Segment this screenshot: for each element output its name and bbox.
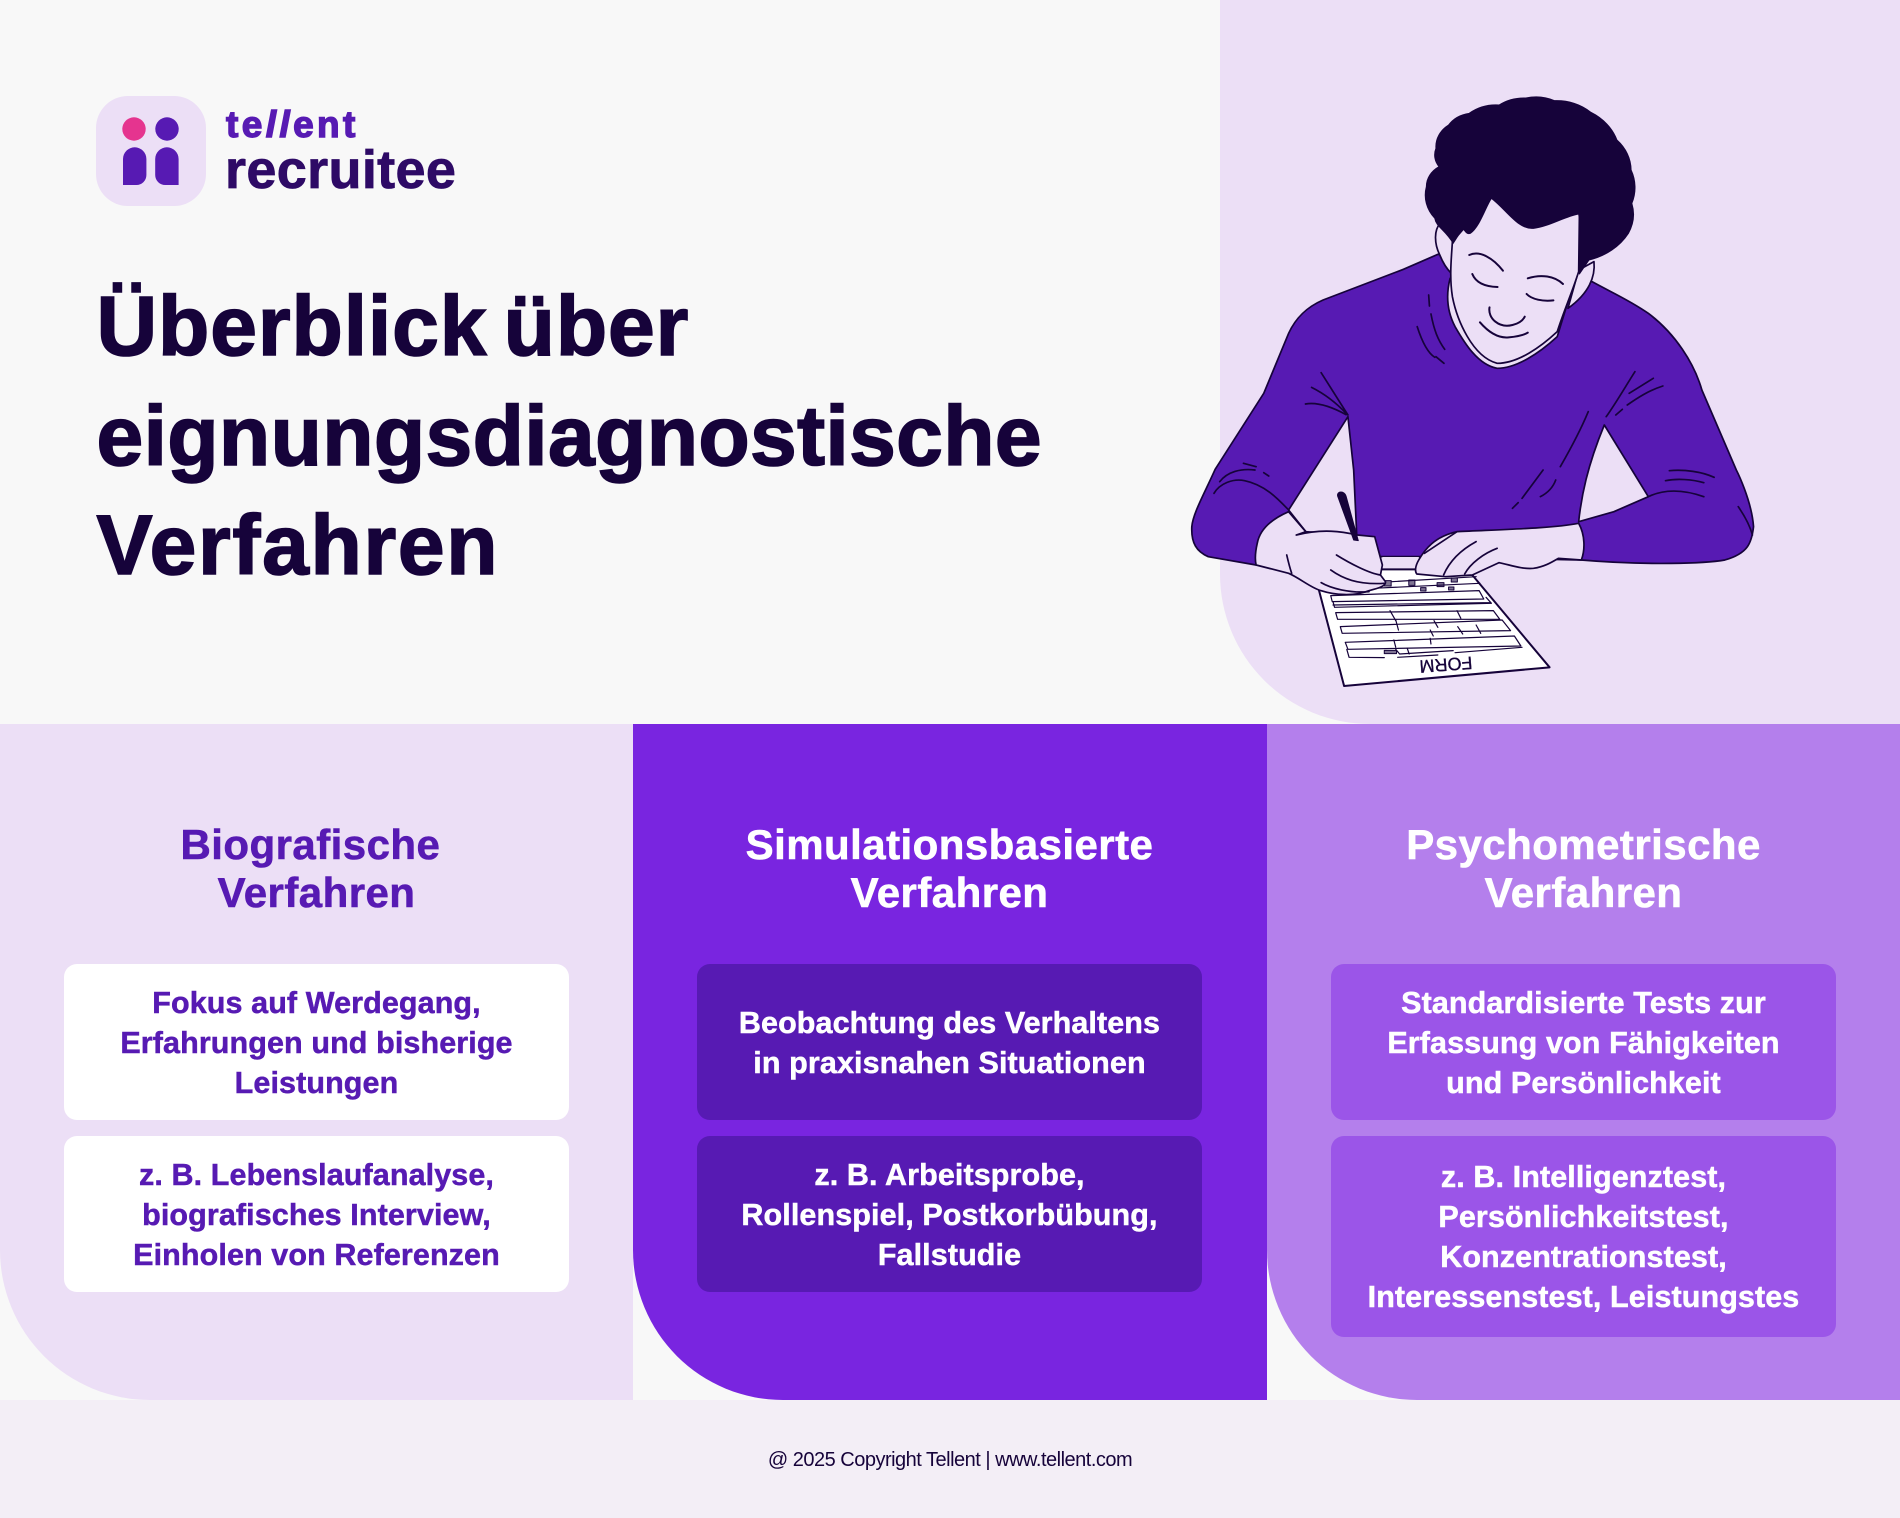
- title: eignungsdiagnostische: [96, 388, 1042, 482]
- heading: simulationsbasierte: Verfahren: [851, 869, 1048, 916]
- right hand on form: [1416, 523, 1584, 577]
- illustration: person filling a form: [1190, 96, 1754, 687]
- FORM label: FORM: [1419, 652, 1473, 677]
- panel: psychometrische Verfahren: [1267, 724, 1900, 1400]
- gap under right arm: [1579, 425, 1648, 522]
- text box: simulation examples: Rollenspiel, Postkorbübung,: [741, 1198, 1158, 1232]
- text box: biografische focus: Fokus auf Werdegang,: [152, 986, 481, 1020]
- text box: biografische focus: Leistungen: [235, 1066, 398, 1100]
- text box: simulation examples: Fallstudie: [878, 1238, 1021, 1272]
- left ear: [1436, 223, 1455, 273]
- text box: simulation examples: [697, 1136, 1202, 1292]
- text box: biografische examples: z. B. Lebenslaufanalyse,: [139, 1158, 494, 1192]
- heading: biografische: Biografische: [181, 821, 440, 868]
- title: Verfahren: [96, 498, 499, 592]
- hero background shape: [1220, 0, 1900, 724]
- collar: [1448, 257, 1576, 368]
- text box: simulation examples: z. B. Arbeitsprobe,: [814, 1158, 1085, 1192]
- wordmark tellent: tellent: [226, 104, 359, 145]
- logo icon: [96, 96, 206, 206]
- title: Überblick über: [96, 279, 689, 373]
- sweater: [1192, 254, 1754, 565]
- heading: biografische: Verfahren: [218, 869, 415, 916]
- text box: psychometric focus: [1331, 964, 1836, 1120]
- text box: biografische focus: [64, 964, 569, 1120]
- heading: psychometrische: Verfahren: [1485, 869, 1682, 916]
- facial features: [1469, 254, 1563, 337]
- heading: psychometrische: Psychometrische: [1406, 821, 1761, 868]
- text box: psychometric examples: Konzentrationstest,: [1440, 1240, 1727, 1274]
- gap under left arm: [1289, 417, 1357, 535]
- title: [96, 279, 1042, 592]
- wordmark recruitee: recruitee: [225, 140, 456, 200]
- hair: [1425, 97, 1635, 274]
- table patch: [1380, 557, 1419, 573]
- left hand holding pen: [1255, 512, 1385, 595]
- right hand fingers: [1424, 532, 1497, 575]
- logo: [96, 96, 456, 206]
- pen: [1338, 492, 1358, 541]
- heading: simulationsbasierte: [746, 821, 1153, 916]
- sweater folds: [1214, 295, 1752, 535]
- text box: psychometric examples: [1331, 1136, 1836, 1337]
- face: [1451, 197, 1579, 363]
- text box: psychometric examples: z. B. Intelligenztest,: [1441, 1160, 1726, 1194]
- left hand details: [1287, 512, 1384, 592]
- heading: biografische: [181, 821, 440, 916]
- text box: simulation focus: [697, 964, 1202, 1120]
- right ear: [1568, 262, 1594, 308]
- text box: psychometric focus: Erfassung von Fähigkeiten: [1387, 1026, 1780, 1060]
- text box: psychometric examples: Persönlichkeitstest,: [1438, 1200, 1729, 1234]
- text box: biografische examples: Einholen von Referenzen: [133, 1238, 500, 1272]
- form sheet: [1318, 569, 1550, 686]
- text box: psychometric examples: Interessenstest, Leistungstes: [1368, 1280, 1799, 1314]
- heading: psychometrische: [1406, 821, 1761, 916]
- panel: simulationsbasierte Verfahren: [633, 724, 1267, 1400]
- heading: simulationsbasierte: Simulationsbasierte: [746, 821, 1153, 868]
- text box: biografische examples: [64, 1136, 569, 1292]
- footer: [0, 1400, 1900, 1518]
- copyright: @ 2025 Copyright Tellent | www.tellent.com: [768, 1449, 1132, 1471]
- text box: biografische focus: Erfahrungen und bisherige: [120, 1026, 513, 1060]
- text box: psychometric focus: Standardisierte Tests zur: [1401, 986, 1766, 1020]
- text box: simulation focus: in praxisnahen Situationen: [753, 1046, 1146, 1080]
- text box: simulation focus: Beobachtung des Verhaltens: [739, 1006, 1160, 1040]
- panel: biografische Verfahren: [0, 724, 633, 1400]
- text box: biografische examples: biografisches Interview,: [142, 1198, 491, 1232]
- text box: psychometric focus: und Persönlichkeit: [1446, 1066, 1721, 1100]
